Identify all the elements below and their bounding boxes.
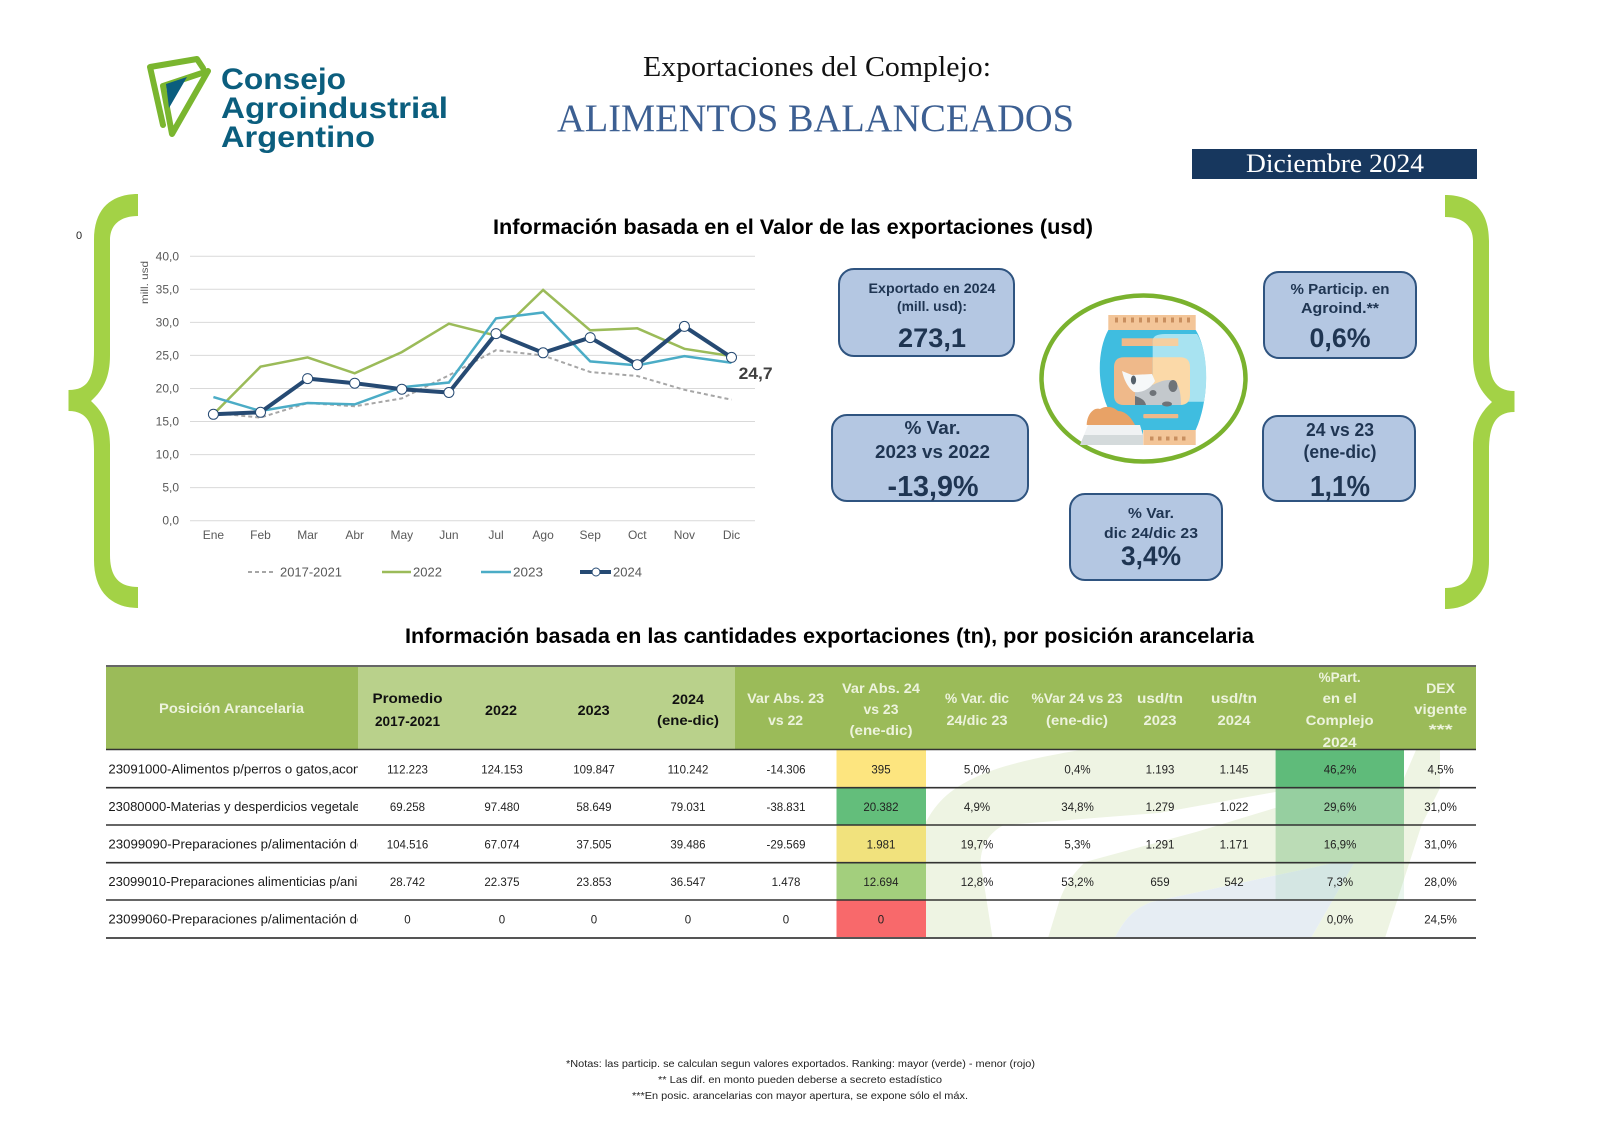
- row: 23099060: 0: [499, 914, 505, 926]
- row: 23099010: [109, 876, 1456, 888]
- row: 23099090: 67.074: [484, 840, 520, 852]
- KPI: 24 vs 23: 24 vs 23: [1306, 420, 1374, 440]
- KPI: var 2023 vs 2022: -13,9%: [888, 471, 979, 503]
- table header: %Part.: [1319, 669, 1361, 685]
- table header: Complejo: [1306, 712, 1374, 728]
- row: 23099090: -29.569: [766, 840, 806, 852]
- table header: DEX: [1426, 680, 1456, 696]
- logo wordmark: Agroindustrial: [221, 92, 448, 125]
- KPI: 24 vs 23: [1263, 416, 1415, 503]
- y axis title: mill. usd: [139, 261, 151, 304]
- y axis labels: 30,0: [156, 316, 179, 330]
- row: 23099090: 19,7%: [961, 840, 993, 852]
- y axis labels: 15,0: [156, 414, 179, 428]
- y axis labels: 35,0: [156, 282, 179, 296]
- table: export quantities by tariff position: [106, 666, 1476, 938]
- row: 23099010: 7,3%: [1327, 877, 1353, 889]
- row: 23099010: 1.478: [772, 877, 800, 889]
- stray zero label: 0: [76, 230, 82, 242]
- row: 23099090: 37.505: [576, 840, 612, 852]
- table header: 2024: [1218, 712, 1251, 728]
- table header: vigente: [1414, 701, 1467, 717]
- logo wordmark: Argentino: [221, 121, 375, 154]
- icon: pet food bag in oval: [1042, 296, 1247, 463]
- KPI: participacion: 0,6%: [1310, 323, 1370, 353]
- table header: Var Abs. 24: [842, 680, 920, 696]
- row: 23091000: 23091000-Alimentos p/perros o gatos,acon: [108, 762, 360, 776]
- row: 23099060: 0: [878, 914, 884, 926]
- KPI: var dic 24 / dic 23: dic 24/dic 23: [1104, 525, 1198, 542]
- title: Exportaciones del Complejo:: [643, 51, 991, 83]
- row: 23091000: 46,2%: [1324, 764, 1356, 776]
- KPI: var dic 24 / dic 23: [1070, 494, 1222, 580]
- x axis labels: Jun: [439, 528, 459, 542]
- row: 23080000: 23080000-Materias y desperdicios vegetales: [108, 799, 367, 814]
- row: 23080000: 1.022: [1220, 802, 1248, 814]
- row: 23099090: [109, 839, 1456, 851]
- data label: December 2024: 24,7: [739, 364, 773, 383]
- row: 23080000: 69.258: [390, 802, 425, 814]
- table header: 2023: [578, 702, 610, 718]
- heading: value section: Información basada en el Valor de las exportaciones (usd): [493, 216, 1093, 239]
- KPI: var 2023 vs 2022: [832, 415, 1028, 503]
- row: 23080000: [109, 802, 1456, 814]
- row: 23099060: 0,0%: [1327, 914, 1353, 926]
- table header: 2017-2021: [375, 713, 440, 729]
- KPI: var 2023 vs 2022: 2023 vs 2022: [875, 442, 990, 462]
- KPI: var dic 24 / dic 23: 3,4%: [1121, 541, 1181, 571]
- row: 23099090: 104.516: [387, 840, 428, 852]
- row: 23091000: 124.153: [481, 764, 523, 776]
- table header: en el: [1323, 690, 1357, 706]
- row: 23091000: [109, 764, 1454, 776]
- x axis labels: Jul: [488, 528, 504, 542]
- row: 23091000: 0,4%: [1064, 764, 1091, 776]
- row: 23099090: 1.171: [1220, 840, 1248, 852]
- row: 23099090: 16,9%: [1324, 840, 1356, 852]
- table header: 2024: [672, 691, 704, 707]
- table header: % Var. dic: [945, 690, 1009, 706]
- row: 23099010: 542: [1224, 877, 1244, 889]
- chart legend: 2023: [513, 564, 543, 580]
- x axis labels: Mar: [297, 528, 318, 542]
- y axis labels: 20,0: [156, 382, 179, 396]
- row: 23099060: 0: [685, 914, 691, 926]
- row: 23099010: 12.694: [863, 877, 899, 889]
- KPI: participacion: % Particip. en: [1290, 281, 1390, 298]
- table header: Var Abs. 23: [747, 690, 824, 706]
- logo wordmark: [221, 63, 448, 154]
- y axis labels: [156, 250, 179, 528]
- row: 23099060: 0: [591, 914, 597, 926]
- x axis labels: Ago: [532, 528, 554, 542]
- KPI: exportado en 2024: (mill. usd):: [897, 298, 967, 314]
- y axis labels: 5,0: [162, 480, 179, 494]
- row: 23099010: 23099010-Preparaciones alimenticias p/ani: [108, 874, 358, 889]
- y axis labels: 25,0: [156, 348, 179, 362]
- row: 23099010: 659: [1150, 877, 1170, 889]
- y axis labels: 40,0: [156, 250, 179, 264]
- KPI: 24 vs 23: 1,1%: [1310, 471, 1370, 503]
- heat cells: participation: [1276, 750, 1404, 900]
- row: 23099010: 53,2%: [1061, 877, 1094, 889]
- chart legend: 2024: [613, 564, 642, 580]
- x axis labels: Sep: [580, 528, 601, 542]
- table header: Promedio: [372, 690, 442, 706]
- KPI: exportado en 2024: 273,1: [898, 323, 966, 353]
- title: [557, 51, 1074, 140]
- KPI: 24 vs 23: (ene-dic): [1304, 442, 1376, 462]
- footnotes: *Notas: las particip. se calculan segun valores exportados. Ranking: mayor (verde) - menor (rojo): [566, 1058, 1035, 1070]
- row: 23080000: 1.279: [1146, 802, 1174, 814]
- row: 23099060: 0: [783, 914, 789, 926]
- chart legend: 2017-2021: [280, 564, 342, 580]
- row: 23099010: 22.375: [484, 877, 520, 889]
- table header: ***: [1429, 721, 1453, 737]
- icon: logo mark: [150, 59, 208, 134]
- KPI: participacion: [1264, 272, 1416, 358]
- row: 23080000: 79.031: [670, 802, 706, 814]
- series: 2024: [208, 321, 736, 419]
- row: 23091000: -14.306: [766, 764, 806, 776]
- row: 23099090: 23099090-Preparaciones p/alimentación de: [108, 836, 364, 852]
- KPI: exportado en 2024: Exportado en 2024: [868, 280, 996, 296]
- table header: %Var 24 vs 23: [1032, 690, 1123, 706]
- series: 2017-2021: [213, 350, 731, 418]
- logo wordmark: Consejo: [221, 63, 346, 96]
- row: 23080000: 97.480: [484, 802, 520, 814]
- heading: quantity section: Información basada en las cantidades exportaciones (tn), por posición arancelaria: [405, 625, 1254, 648]
- row: 23099010: 12,8%: [961, 877, 993, 889]
- row: 23099060: 24,5%: [1424, 914, 1457, 926]
- row: 23099010: 28,0%: [1424, 877, 1457, 889]
- table header: 24/dic 23: [946, 712, 1008, 728]
- KPI: exportado en 2024: [839, 269, 1014, 356]
- table header: usd/tn: [1211, 690, 1257, 706]
- row: 23091000: 1.145: [1220, 764, 1248, 776]
- row: 23099060: 23099060-Preparaciones p/alimentación de: [108, 912, 364, 926]
- row: 23080000: 31,0%: [1424, 802, 1457, 814]
- row: 23099090: 1.981: [867, 840, 895, 852]
- row: 23099090: 31,0%: [1424, 840, 1457, 852]
- x axis labels: Dic: [723, 528, 740, 542]
- table header: [106, 667, 1476, 750]
- row: 23091000: 112.223: [387, 764, 428, 776]
- chart legend: 2022: [413, 564, 442, 580]
- footnotes: ** Las dif. en monto pueden deberse a secreto estadístico: [658, 1074, 942, 1086]
- KPI: var 2023 vs 2022: % Var.: [904, 418, 960, 438]
- row: 23099090: 1.291: [1146, 840, 1174, 852]
- table rules: [106, 666, 1476, 938]
- series: 2023: [213, 312, 731, 411]
- date badge: [1192, 149, 1477, 179]
- row: 23080000: 4,9%: [964, 802, 990, 814]
- y axis labels: 0,0: [162, 514, 179, 528]
- table header: 2022: [485, 702, 517, 718]
- table header: 2024: [1323, 734, 1357, 750]
- table header: vs 22: [768, 712, 803, 728]
- x axis labels: [203, 528, 740, 542]
- table watermark: [915, 750, 1440, 938]
- x axis labels: Feb: [250, 528, 271, 542]
- row: 23091000: 5,0%: [964, 764, 990, 776]
- row: 23091000: 110.242: [668, 764, 708, 776]
- row: 23099090: 39.486: [670, 840, 706, 852]
- y axis labels: 10,0: [156, 448, 179, 462]
- date badge: Diciembre 2024: [1246, 149, 1424, 178]
- row: 23099090: 5,3%: [1064, 840, 1091, 852]
- table header: usd/tn: [1137, 690, 1183, 706]
- row: 23099010: 36.547: [670, 877, 706, 889]
- row: 23080000: 20.382: [863, 802, 899, 814]
- x axis labels: Abr: [345, 528, 364, 542]
- table header: vs 23: [864, 701, 899, 717]
- row: 23091000: 395: [871, 764, 891, 776]
- title: ALIMENTOS BALANCEADOS: [557, 97, 1074, 140]
- KPI: var dic 24 / dic 23: % Var.: [1128, 505, 1174, 522]
- footnotes: ***En posic. arancelarias con mayor apertura, se expone sólo el máx.: [632, 1090, 968, 1102]
- row: 23080000: -38.831: [766, 802, 806, 814]
- row: 23099060: 0: [404, 914, 411, 926]
- footnotes: [566, 1058, 1035, 1102]
- row: 23091000: 109.847: [573, 764, 615, 776]
- row: 23080000: 58.649: [576, 802, 612, 814]
- KPI: participacion: Agroind.**: [1301, 300, 1379, 317]
- table header: (ene-dic): [850, 722, 912, 738]
- table header: (ene-dic): [1046, 712, 1108, 728]
- table header: (ene-dic): [657, 712, 719, 728]
- chart legend: [248, 564, 642, 580]
- line chart: monthly exports: [139, 250, 773, 580]
- row: 23080000: 34,8%: [1061, 802, 1094, 814]
- x axis labels: Ene: [203, 528, 224, 542]
- row: 23099060: [109, 914, 1456, 926]
- logo: Consejo Agroindustrial Argentino: [150, 59, 448, 154]
- x axis labels: Nov: [674, 528, 695, 542]
- heat cells: var abs 24 vs 23: [836, 750, 926, 938]
- x axis labels: May: [390, 528, 413, 542]
- row: 23091000: 4,5%: [1427, 764, 1454, 776]
- series: 2022: [213, 290, 731, 414]
- x axis labels: Oct: [628, 528, 647, 542]
- row: 23099010: 23.853: [576, 877, 612, 889]
- table header: Posición Arancelaria: [159, 700, 304, 716]
- right brace: [1445, 195, 1514, 609]
- left brace: [68, 194, 138, 608]
- row: 23080000: 29,6%: [1324, 802, 1356, 814]
- table header: 2023: [1144, 712, 1177, 728]
- row: 23099010: 28.742: [390, 877, 425, 889]
- row: 23091000: 1.193: [1146, 764, 1174, 776]
